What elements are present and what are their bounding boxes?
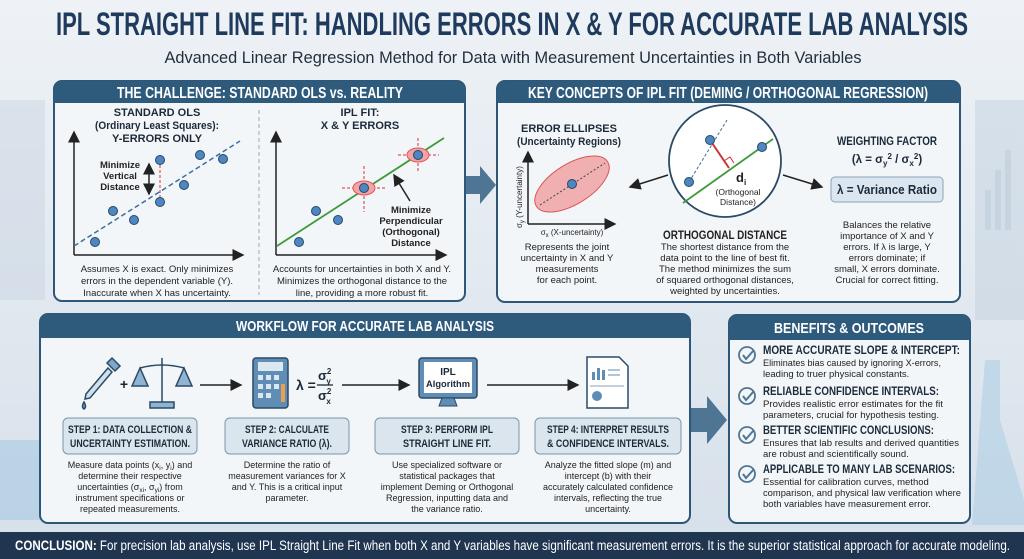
formula: lambda: λ = [296, 377, 316, 393]
chart: IPL fit: Perpendicular [379, 216, 443, 227]
benefit 1: MORE ACCURATE SLOPE & INTERCEPT: [763, 343, 960, 357]
formula: lambda: y [326, 377, 331, 386]
step 4: STEP 4: INTERPRET RESULTS [547, 424, 669, 436]
arrow: challenge to concepts [466, 166, 496, 204]
weighting factor: 2 [888, 152, 892, 161]
text: IPL description [273, 264, 451, 299]
panel: workflow [40, 314, 690, 523]
benefit 4: both variables have measurement error. [763, 499, 931, 510]
step 3: STRAIGHT LINE FIT. [403, 438, 491, 450]
text: IPL description: Minimizes the orthogonal distance to the [277, 276, 447, 287]
step 1: UNCERTAINTY ESTIMATION. [70, 438, 190, 450]
benefit 1: Eliminates bias caused by ignoring X-errors, [763, 358, 941, 369]
step 2: VARIANCE RATIO (λ). [242, 438, 332, 450]
text: OLS description: Assumes X is exact. Only minimizes [81, 264, 234, 275]
icon: monitor: Algorithm [426, 379, 470, 390]
error ellipses: (Uncertainty Regions) [517, 136, 621, 148]
step 4: Analyze the fitted slope (m) and [545, 460, 671, 470]
text: ellipse description [521, 242, 614, 286]
weighting factor: small, X errors dominate. [834, 264, 940, 275]
weighting factor [831, 136, 943, 286]
benefit 2 [739, 384, 943, 421]
text: OLS description [81, 264, 234, 299]
weighting factor: (λ = σ [852, 154, 883, 166]
chart: IPL fit [276, 107, 446, 255]
error ellipses: x [546, 233, 549, 239]
orthogonal distance diagram: d [736, 170, 744, 185]
step 1: , y [161, 460, 171, 470]
formula: lambda: σ [318, 368, 327, 383]
orthogonal distance diagram: i [744, 178, 746, 187]
panel: workflow: WORKFLOW FOR ACCURATE LAB ANALYSIS [236, 318, 494, 335]
weighting factor: WEIGHTING FACTOR [837, 136, 938, 148]
text: ellipse description: Represents the joint [525, 242, 610, 253]
step 4 [535, 418, 681, 514]
step 1: ) from [159, 482, 183, 492]
icon: calculator [253, 358, 288, 408]
error ellipses: σ [515, 223, 524, 228]
decorative background lab [0, 100, 1024, 525]
step 2: parameter. [265, 493, 309, 503]
formula: lambda: x [326, 397, 331, 406]
chart: IPL fit: Distance [391, 238, 431, 249]
text: orthogonal distance: ORTHOGONAL DISTANCE [663, 228, 787, 242]
error ellipses: y [520, 220, 526, 223]
chart: standard OLS: (Ordinary Least Squares): [95, 120, 219, 132]
step 1: uncertainties (σ [77, 482, 139, 492]
benefit 3: Ensures that lab results and derived quantities [763, 438, 959, 449]
text: orthogonal distance: The method minimizes the sum [659, 264, 791, 275]
formula: lambda: 2 [327, 367, 332, 376]
orthogonal distance diagram: Distance) [720, 197, 756, 207]
step 2: measurement variances for X [228, 471, 346, 481]
panel: workflow: + [120, 376, 128, 392]
chart: IPL fit: Minimize [391, 205, 431, 216]
chart: IPL fit: (Orthogonal) [382, 227, 440, 238]
weighting factor: errors. If λ is large, Y [843, 242, 931, 253]
arrow: step2-3 [342, 384, 409, 386]
weighting factor: / σ [892, 154, 910, 166]
icon: monitor [419, 358, 477, 406]
icon: scales [132, 358, 192, 408]
chart: IPL fit: X & Y ERRORS [321, 120, 399, 132]
step 4: intercept (b) with their [565, 471, 651, 481]
formula: lambda [296, 367, 333, 406]
step 3 [375, 418, 519, 514]
step 3: STEP 3: PERFORM IPL [401, 424, 493, 436]
error ellipses: (X-uncertainty) [549, 228, 604, 237]
step 1 [63, 418, 197, 514]
benefit 4 [739, 462, 961, 510]
benefit 1: leading to truer physical constants. [763, 369, 909, 380]
weighting factor: ) [918, 154, 922, 166]
chart: standard OLS: Vertical [103, 171, 137, 182]
step 4: uncertainty. [585, 504, 631, 514]
arrow: step1-2 [200, 384, 241, 386]
text: ellipse description: uncertainty in X and Y [521, 253, 614, 264]
text: OLS description: errors in the dependent variable (Y). [81, 276, 233, 287]
text: ellipse description: for each point. [537, 275, 597, 286]
step 1: xi [139, 487, 144, 494]
benefit 1 [739, 343, 960, 380]
step 4: intervals, reflecting the true [554, 493, 662, 503]
panel: key concepts [497, 81, 960, 302]
arrow: to weighting [783, 175, 822, 187]
benefit 3 [739, 423, 959, 460]
formula: lambda: σ [318, 388, 327, 403]
step 1: i [170, 465, 172, 472]
text: OLS description: Inaccurate when X has uncertainty. [83, 288, 231, 299]
step 2 [225, 418, 349, 503]
benefit 2: parameters, crucial for hypothesis testing. [763, 410, 939, 421]
chart: standard OLS: STANDARD OLS [114, 107, 200, 119]
chart: standard OLS: Distance [100, 182, 140, 193]
error ellipses: σ [541, 228, 546, 237]
benefit 2: RELIABLE CONFIDENCE INTERVALS: [763, 384, 939, 398]
panel: challenge: THE CHALLENGE: STANDARD OLS vs. REALITY [117, 85, 403, 102]
arrow: to ellipses [630, 175, 668, 187]
formula: lambda: 2 [327, 387, 332, 396]
benefit 2: Provides realistic error estimates for the fit [763, 399, 943, 410]
benefit 4: comparison, and physical law verification where [763, 488, 961, 499]
step 4: accurately calculated confidence [543, 482, 673, 492]
step 3: the variance ratio. [411, 504, 483, 514]
step 2: STEP 2: CALCULATE [245, 424, 329, 436]
step 1: yi [155, 487, 159, 494]
text: orthogonal distance: The shortest distance from the [661, 242, 789, 253]
step 3: Use specialized software or [392, 460, 502, 470]
step 3: Regression, inputting data and [386, 493, 508, 503]
benefit 3: BETTER SCIENTIFIC CONCLUSIONS: [763, 423, 934, 437]
weighting factor: 2 [914, 152, 919, 161]
arrow: workflow to benefits [691, 396, 727, 444]
step 3: implement Deming or Orthogonal [381, 482, 513, 492]
panel: benefits: BENEFITS & OUTCOMES [774, 320, 924, 337]
orthogonal distance diagram [669, 105, 781, 217]
weighting factor: Balances the relative [843, 220, 931, 231]
benefit 4: APPLICABLE TO MANY LAB SCENARIOS: [763, 462, 955, 476]
step 1: Measure data points (x [68, 460, 159, 470]
subtitle: Advanced Linear Regression Method for Data with Measurement Uncertainties in Both Variables [164, 48, 862, 67]
weighting factor: Crucial for correct fitting. [836, 275, 938, 286]
benefit 3: are robust and scientifically sound. [763, 449, 909, 460]
step 3: statistical packages that [399, 471, 495, 481]
weighting factor: errors dominate; if [849, 253, 926, 264]
error ellipses: (Y-uncertainty) [515, 166, 524, 220]
step 4: & CONFIDENCE INTERVALS. [547, 438, 669, 450]
text: orthogonal distance [656, 228, 794, 297]
error ellipses [515, 123, 621, 239]
icon: report [587, 357, 628, 408]
step 2: and Y. This is a critical input [232, 482, 343, 492]
chart: standard OLS: Y-ERRORS ONLY [112, 133, 203, 145]
text: orthogonal distance: of squared orthogonal distances, [656, 275, 794, 286]
step 1: determine their respective [78, 471, 182, 481]
text: ellipse description: measurements [536, 264, 599, 275]
step 1: i [159, 465, 161, 472]
step 1: , σ [144, 482, 155, 492]
step 1: STEP 1: DATA COLLECTION & [68, 424, 192, 436]
step 1: ) and [172, 460, 192, 470]
step 1: instrument specifications or [75, 493, 185, 503]
weighting factor: x [909, 159, 914, 168]
weighting factor: y [883, 159, 888, 168]
arrow: step3-4 [487, 384, 578, 386]
error ellipses: ERROR ELLIPSES [521, 123, 617, 135]
weighting factor: λ = Variance Ratio [837, 182, 937, 197]
chart: standard OLS: Minimize [100, 160, 140, 171]
icon: dropper [82, 358, 120, 409]
chart: IPL fit: IPL FIT: [341, 107, 379, 119]
benefit 4: Essential for calibration curves, method [763, 477, 929, 488]
conclusion bar [0, 532, 1024, 559]
orthogonal distance diagram: (Orthogonal [716, 187, 761, 197]
step 2: Determine the ratio of [244, 460, 331, 470]
panel: challenge [54, 81, 465, 301]
step 1: repeated measurements. [80, 504, 180, 514]
text: IPL description: line, providing a more robust fit. [296, 288, 428, 299]
text: orthogonal distance: data point to the line of best fit. [660, 253, 790, 264]
weighting factor: importance of X and Y [840, 231, 935, 242]
panel: benefits [729, 315, 970, 523]
text: orthogonal distance: weighted by uncertainties. [669, 286, 780, 297]
chart: standard OLS [74, 107, 243, 255]
text: IPL description: Accounts for uncertainties in both X and Y. [273, 264, 451, 275]
icon: monitor: IPL [440, 367, 456, 378]
